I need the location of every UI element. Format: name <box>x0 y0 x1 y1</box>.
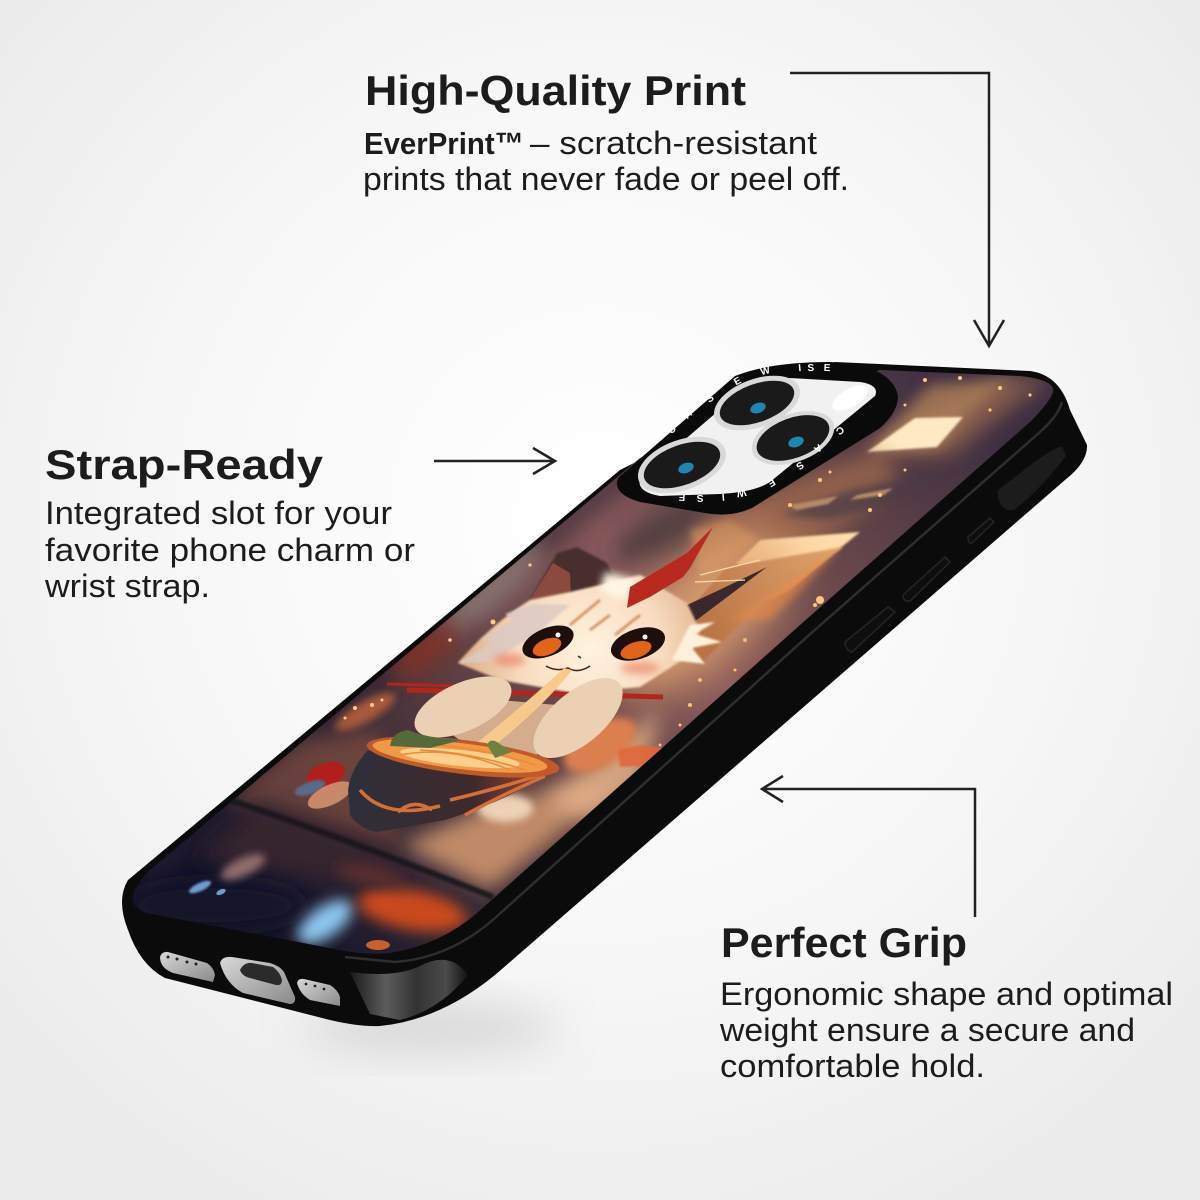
brand lettering bottom: E <box>765 476 777 489</box>
right speaker grille <box>297 979 340 1006</box>
brand lettering bottom: W <box>735 486 747 499</box>
chopsticks <box>387 684 663 697</box>
floor reflections <box>188 850 474 950</box>
brand lettering bottom: S <box>696 492 704 503</box>
camera ring <box>617 362 898 515</box>
description: wrist strap. <box>44 568 210 604</box>
grey street left of cat <box>437 540 550 640</box>
city lights top <box>607 376 1050 762</box>
ramen bowl <box>348 728 561 832</box>
brand lettering bottom: A <box>811 441 824 455</box>
case body <box>122 362 1087 1026</box>
description: Integrated slot for your <box>45 495 392 531</box>
brand lettering bottom: E <box>678 491 685 502</box>
callout: high-quality print <box>363 67 849 197</box>
cat paws <box>414 676 623 758</box>
description: – scratch-resistant <box>530 125 817 161</box>
warm ball right of paws <box>558 712 640 776</box>
lens top <box>707 365 807 441</box>
heading: Perfect Grip <box>721 919 967 966</box>
brand lettering top: S <box>807 363 815 374</box>
printed artwork <box>132 370 1054 954</box>
table surface <box>195 710 660 890</box>
description: prints that never fade or peel off. <box>363 161 849 197</box>
flash <box>828 380 872 416</box>
charging port <box>220 957 295 1004</box>
description: EverPrint™ <box>364 126 524 161</box>
brand lettering bottom: S <box>793 459 806 472</box>
phone shadow <box>300 1004 560 1052</box>
left speaker grille <box>160 952 215 982</box>
brand lettering bottom: I <box>721 491 725 502</box>
bottom corner shine <box>350 960 468 1020</box>
camera module <box>617 362 898 515</box>
cat left ear <box>530 546 614 600</box>
description: weight ensure a secure and <box>719 1012 1135 1048</box>
description: Ergonomic shape and optimal <box>720 976 1173 1012</box>
noodles from mouth <box>478 668 572 745</box>
brand lettering top: E <box>732 375 744 388</box>
brand lettering top: E <box>824 363 831 374</box>
callout: strap-ready <box>44 441 415 604</box>
callout: perfect grip <box>719 919 1173 1084</box>
brand lettering bottom <box>678 423 846 503</box>
arrow: strap <box>434 448 555 474</box>
phone case <box>122 362 1087 1026</box>
brand lettering top: W <box>759 365 772 378</box>
description <box>363 125 849 197</box>
description: comfortable hold. <box>720 1048 985 1084</box>
arrow: print <box>790 73 1004 346</box>
brand lettering top: I <box>798 363 802 374</box>
description: favorite phone charm or <box>45 532 415 568</box>
side rail highlight <box>345 402 1062 962</box>
lens right <box>744 401 842 475</box>
cat <box>387 527 843 822</box>
lens left <box>630 426 734 504</box>
brand lettering top: S <box>705 392 717 405</box>
brand lettering bottom: C <box>833 423 846 437</box>
table edge shadow <box>230 800 493 897</box>
red fruit <box>294 762 350 809</box>
camera plate <box>639 378 876 496</box>
side buttons <box>845 518 994 652</box>
cat eyes <box>522 626 665 661</box>
description <box>719 976 1173 1084</box>
brand lettering top: C <box>666 424 679 437</box>
cat lower body <box>477 794 533 822</box>
warm glow around cat <box>617 513 814 718</box>
left background lights <box>331 563 532 738</box>
strap slot <box>998 446 1066 510</box>
description <box>44 495 415 604</box>
cat blush <box>494 654 660 674</box>
edge shading <box>140 460 640 880</box>
brand lettering top: A <box>682 409 695 422</box>
cat head <box>458 575 700 693</box>
cat body <box>454 700 554 755</box>
orange box right <box>618 745 665 767</box>
arrow: grip <box>762 776 975 917</box>
cat mouth <box>546 656 590 671</box>
heading: Strap-Ready <box>45 441 324 488</box>
cat hat <box>627 527 713 608</box>
cat right ear <box>672 547 843 665</box>
cat fur <box>458 572 722 664</box>
brand lettering top <box>666 363 831 437</box>
heading: High-Quality Print <box>365 67 746 114</box>
